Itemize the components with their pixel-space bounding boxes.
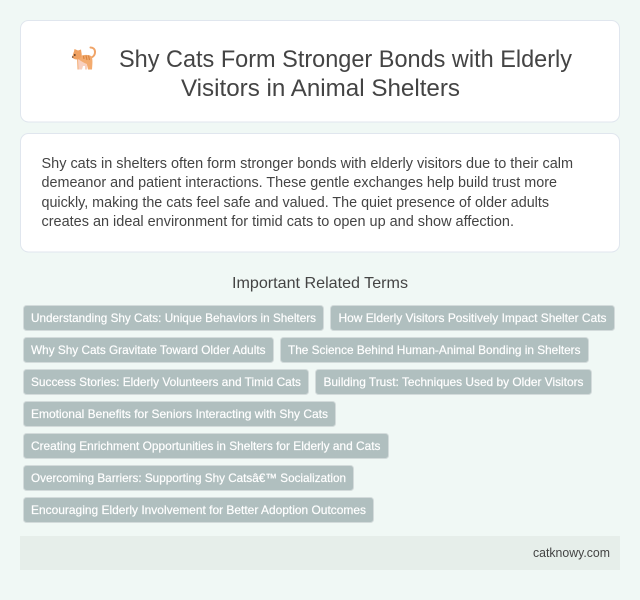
tag (24, 402, 336, 426)
text block: summary (42, 156, 573, 230)
panel: title card (20, 20, 620, 122)
tag: Encouraging Elderly Involvement for Better Adoption Outcomes (31, 503, 366, 517)
tag list: related terms (24, 306, 614, 522)
tag: The Science Behind Human-Animal Bonding in Shelters (288, 343, 580, 357)
tag: Success Stories: Elderly Volunteers and Timid Cats (31, 375, 301, 389)
footer bar (20, 536, 620, 570)
tag: How Elderly Visitors Positively Impact Shelter Cats (338, 311, 606, 325)
footer source: catknowy.com (533, 545, 610, 560)
panel: summary paragraph (20, 134, 620, 252)
tag: Why Shy Cats Gravitate Toward Older Adults (31, 343, 266, 357)
tag: Building Trust: Techniques Used by Older Visitors (324, 375, 584, 389)
tag: Understanding Shy Cats: Unique Behaviors in Shelters (31, 311, 316, 325)
heading: related terms: Important Related Terms (232, 275, 408, 292)
text block: summary: demeanor and patient interactions. These gentle exchanges help build trust more (42, 175, 557, 191)
title (119, 46, 572, 102)
tag (280, 338, 588, 362)
tag (24, 434, 388, 458)
tag (24, 306, 324, 330)
title: Visitors in Animal Shelters (181, 75, 460, 102)
tag (316, 370, 592, 394)
tag (24, 498, 374, 522)
tag (24, 370, 308, 394)
text block: summary: creates an ideal environment for timid cats to open up and show affection. (42, 214, 514, 230)
tag: Overcoming Barriers: Supporting Shy Catsâ€™ Socialization (31, 471, 346, 485)
text block: summary: Shy cats in shelters often form stronger bonds with elderly visitors due to their calm (42, 156, 573, 172)
title: Shy Cats Form Stronger Bonds with Elderly (119, 46, 572, 73)
tag: Emotional Benefits for Seniors Interacting with Shy Cats (31, 407, 328, 421)
icon: orange cat (72, 48, 95, 70)
tag: Creating Enrichment Opportunities in Shelters for Elderly and Cats (31, 439, 380, 453)
tag (24, 466, 354, 490)
tag (330, 306, 614, 330)
text block: summary: quickly, making the cats feel safe and valued. The quiet presence of older adults (42, 195, 549, 211)
tag (24, 338, 274, 362)
